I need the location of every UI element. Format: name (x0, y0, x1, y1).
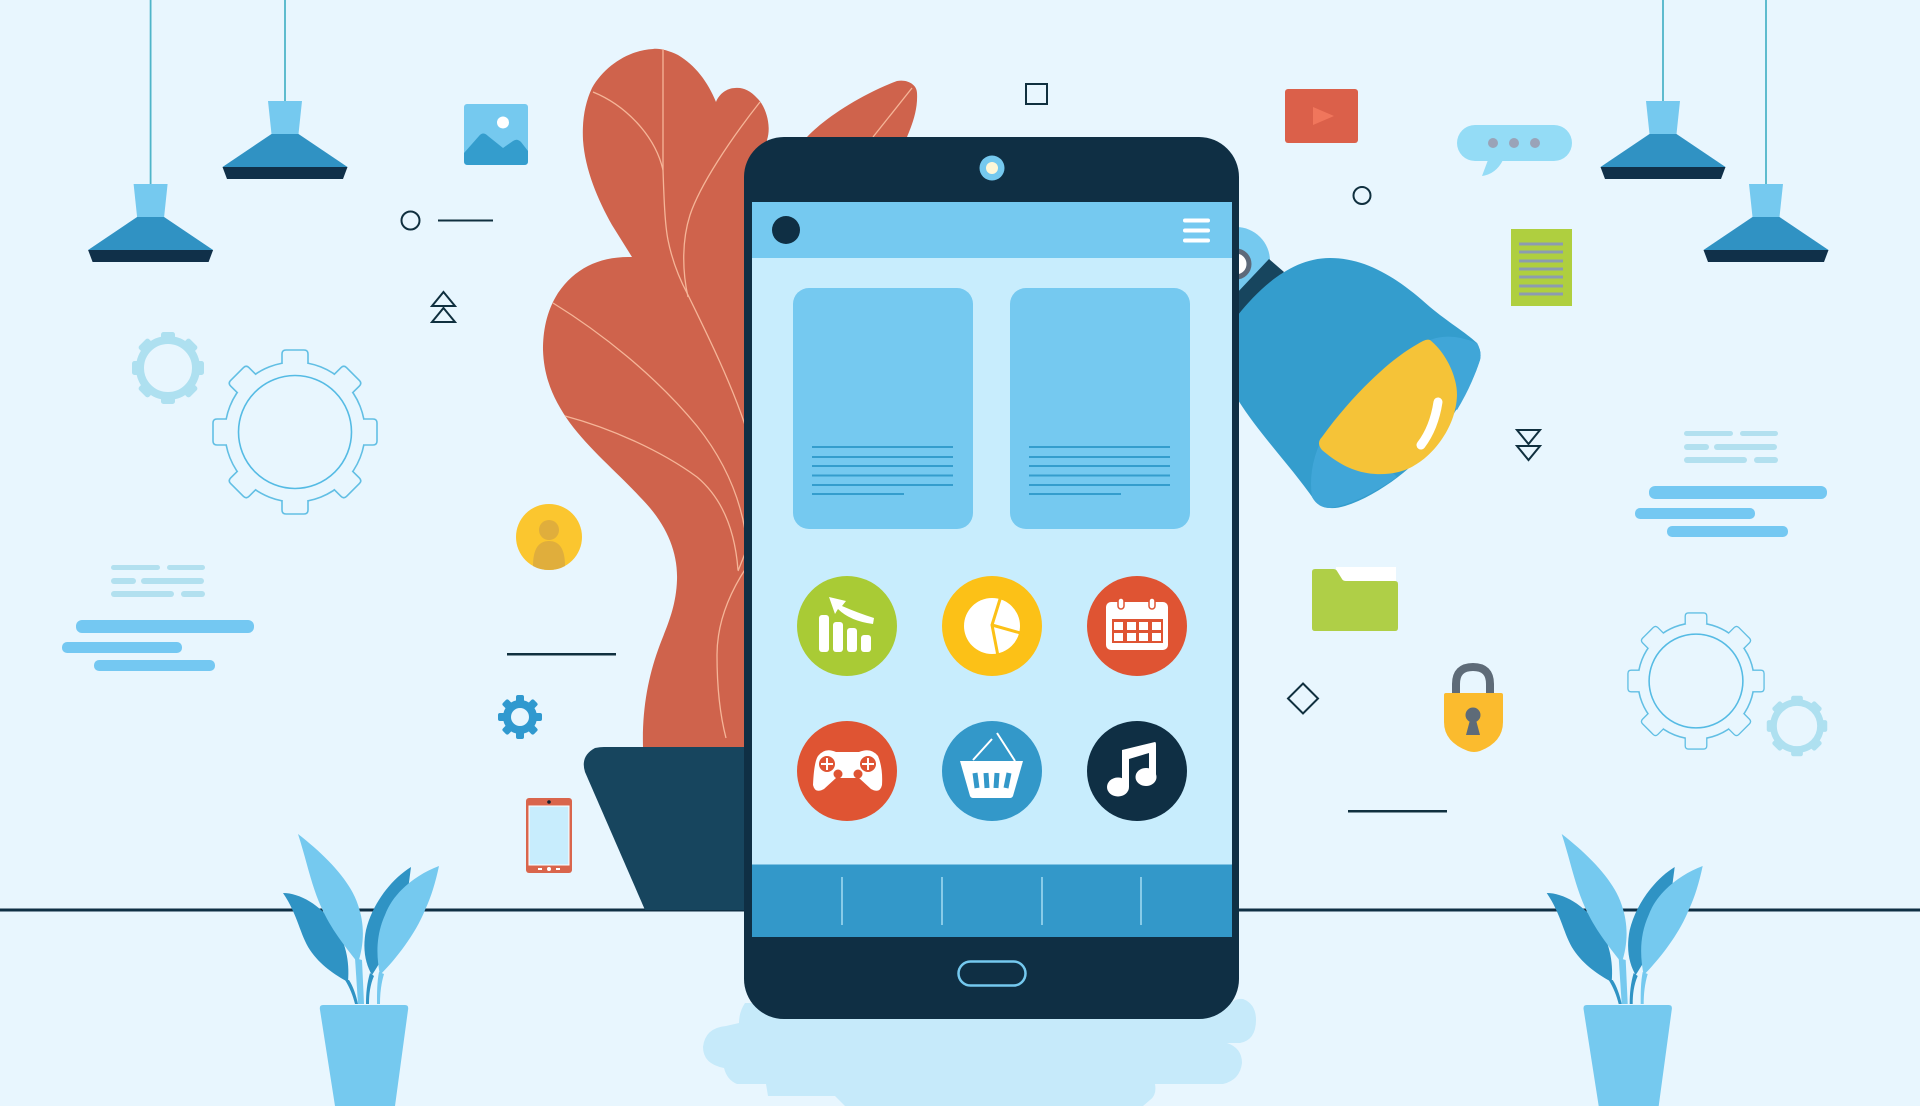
app icon: music note (1087, 721, 1187, 821)
app icon: game controller (797, 721, 897, 821)
floor plant right (1547, 834, 1703, 1106)
icon: double down triangles (1517, 430, 1540, 460)
floor line (0, 908, 1920, 912)
hamburger menu (1185, 220, 1208, 240)
icon: small circle with dash (402, 212, 493, 230)
icon: small blue gear (498, 695, 542, 739)
hanging lamp far right (1704, 0, 1828, 262)
hanging lamp left (222, 0, 348, 179)
text lines right (1635, 431, 1827, 537)
leaf veins (553, 49, 912, 738)
phone screen (752, 202, 1232, 937)
hanging lamp far left (88, 0, 213, 262)
phone (744, 137, 1239, 1019)
icon: document (1511, 229, 1572, 306)
plant leaves large (543, 49, 917, 747)
header dot (772, 216, 800, 244)
plant pot large (584, 747, 760, 910)
cloud under phone (703, 999, 1256, 1106)
icon: user avatar (516, 504, 582, 570)
camera (980, 156, 1004, 180)
desk lamp (1202, 227, 1481, 508)
icon: diamond (1288, 684, 1318, 714)
icon: double up triangles (432, 292, 455, 322)
floor plant left (283, 834, 439, 1106)
hanging lamp right (1600, 0, 1726, 179)
outline gear right (1628, 613, 1764, 749)
line right (1348, 810, 1447, 812)
app icon: pie chart (942, 576, 1042, 676)
home button (958, 962, 1026, 986)
small filled gear left (132, 332, 204, 404)
icon: small phone (526, 798, 572, 873)
lamp bulb (1319, 340, 1457, 474)
content card left (793, 288, 973, 529)
small filled gear right (1767, 696, 1827, 756)
app icon: calendar (1087, 576, 1187, 676)
app header bar (752, 202, 1232, 258)
icon: small circle right (1354, 187, 1370, 204)
icon: video player (1285, 89, 1358, 143)
icon: small square (1026, 84, 1047, 104)
icon: chat bubble (1457, 125, 1572, 176)
content card right (1010, 288, 1190, 529)
app icon: shopping basket (942, 721, 1042, 821)
app icon: chart (797, 576, 897, 676)
icon: picture (464, 104, 528, 165)
bottom navigation bar (752, 864, 1232, 937)
line left (507, 653, 616, 656)
text lines left (62, 565, 254, 671)
outline gear left (213, 350, 377, 514)
icon: folder (1312, 567, 1398, 631)
icon: padlock (1444, 667, 1503, 752)
